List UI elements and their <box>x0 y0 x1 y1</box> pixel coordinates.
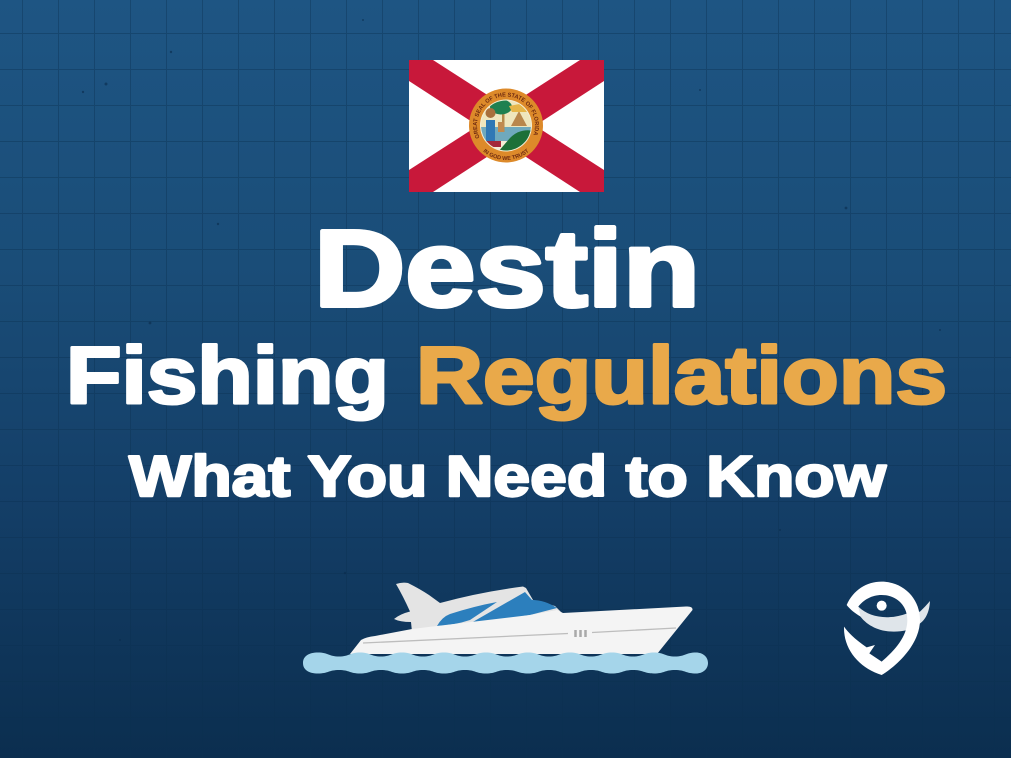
yacht hull <box>350 606 693 654</box>
state seal: IN GOD WE TRUST <box>483 148 528 160</box>
logo eye <box>877 601 887 611</box>
heading: Fishing Regulations <box>66 331 947 421</box>
state seal <box>469 88 543 162</box>
title: Destin: Destin <box>314 208 700 330</box>
hull stripe and vents <box>363 628 676 643</box>
heading: Fishing Regulations: Regulations <box>416 331 947 421</box>
icon: motor yacht on waves <box>303 583 708 674</box>
yacht fin and cabin roof <box>394 583 563 632</box>
logo tail and body band <box>858 601 930 632</box>
icon: fish hook logo <box>844 582 930 675</box>
flag of Florida <box>409 60 604 192</box>
state seal: GREAT SEAL OF THE STATE OF FLORIDA <box>473 92 539 138</box>
waves <box>303 652 708 674</box>
logo hook body <box>844 582 920 675</box>
heading: Fishing Regulations: Fishing <box>66 331 389 421</box>
subtitle: What You Need to Know: What You Need to Know <box>129 445 886 509</box>
yacht windows <box>437 592 557 626</box>
